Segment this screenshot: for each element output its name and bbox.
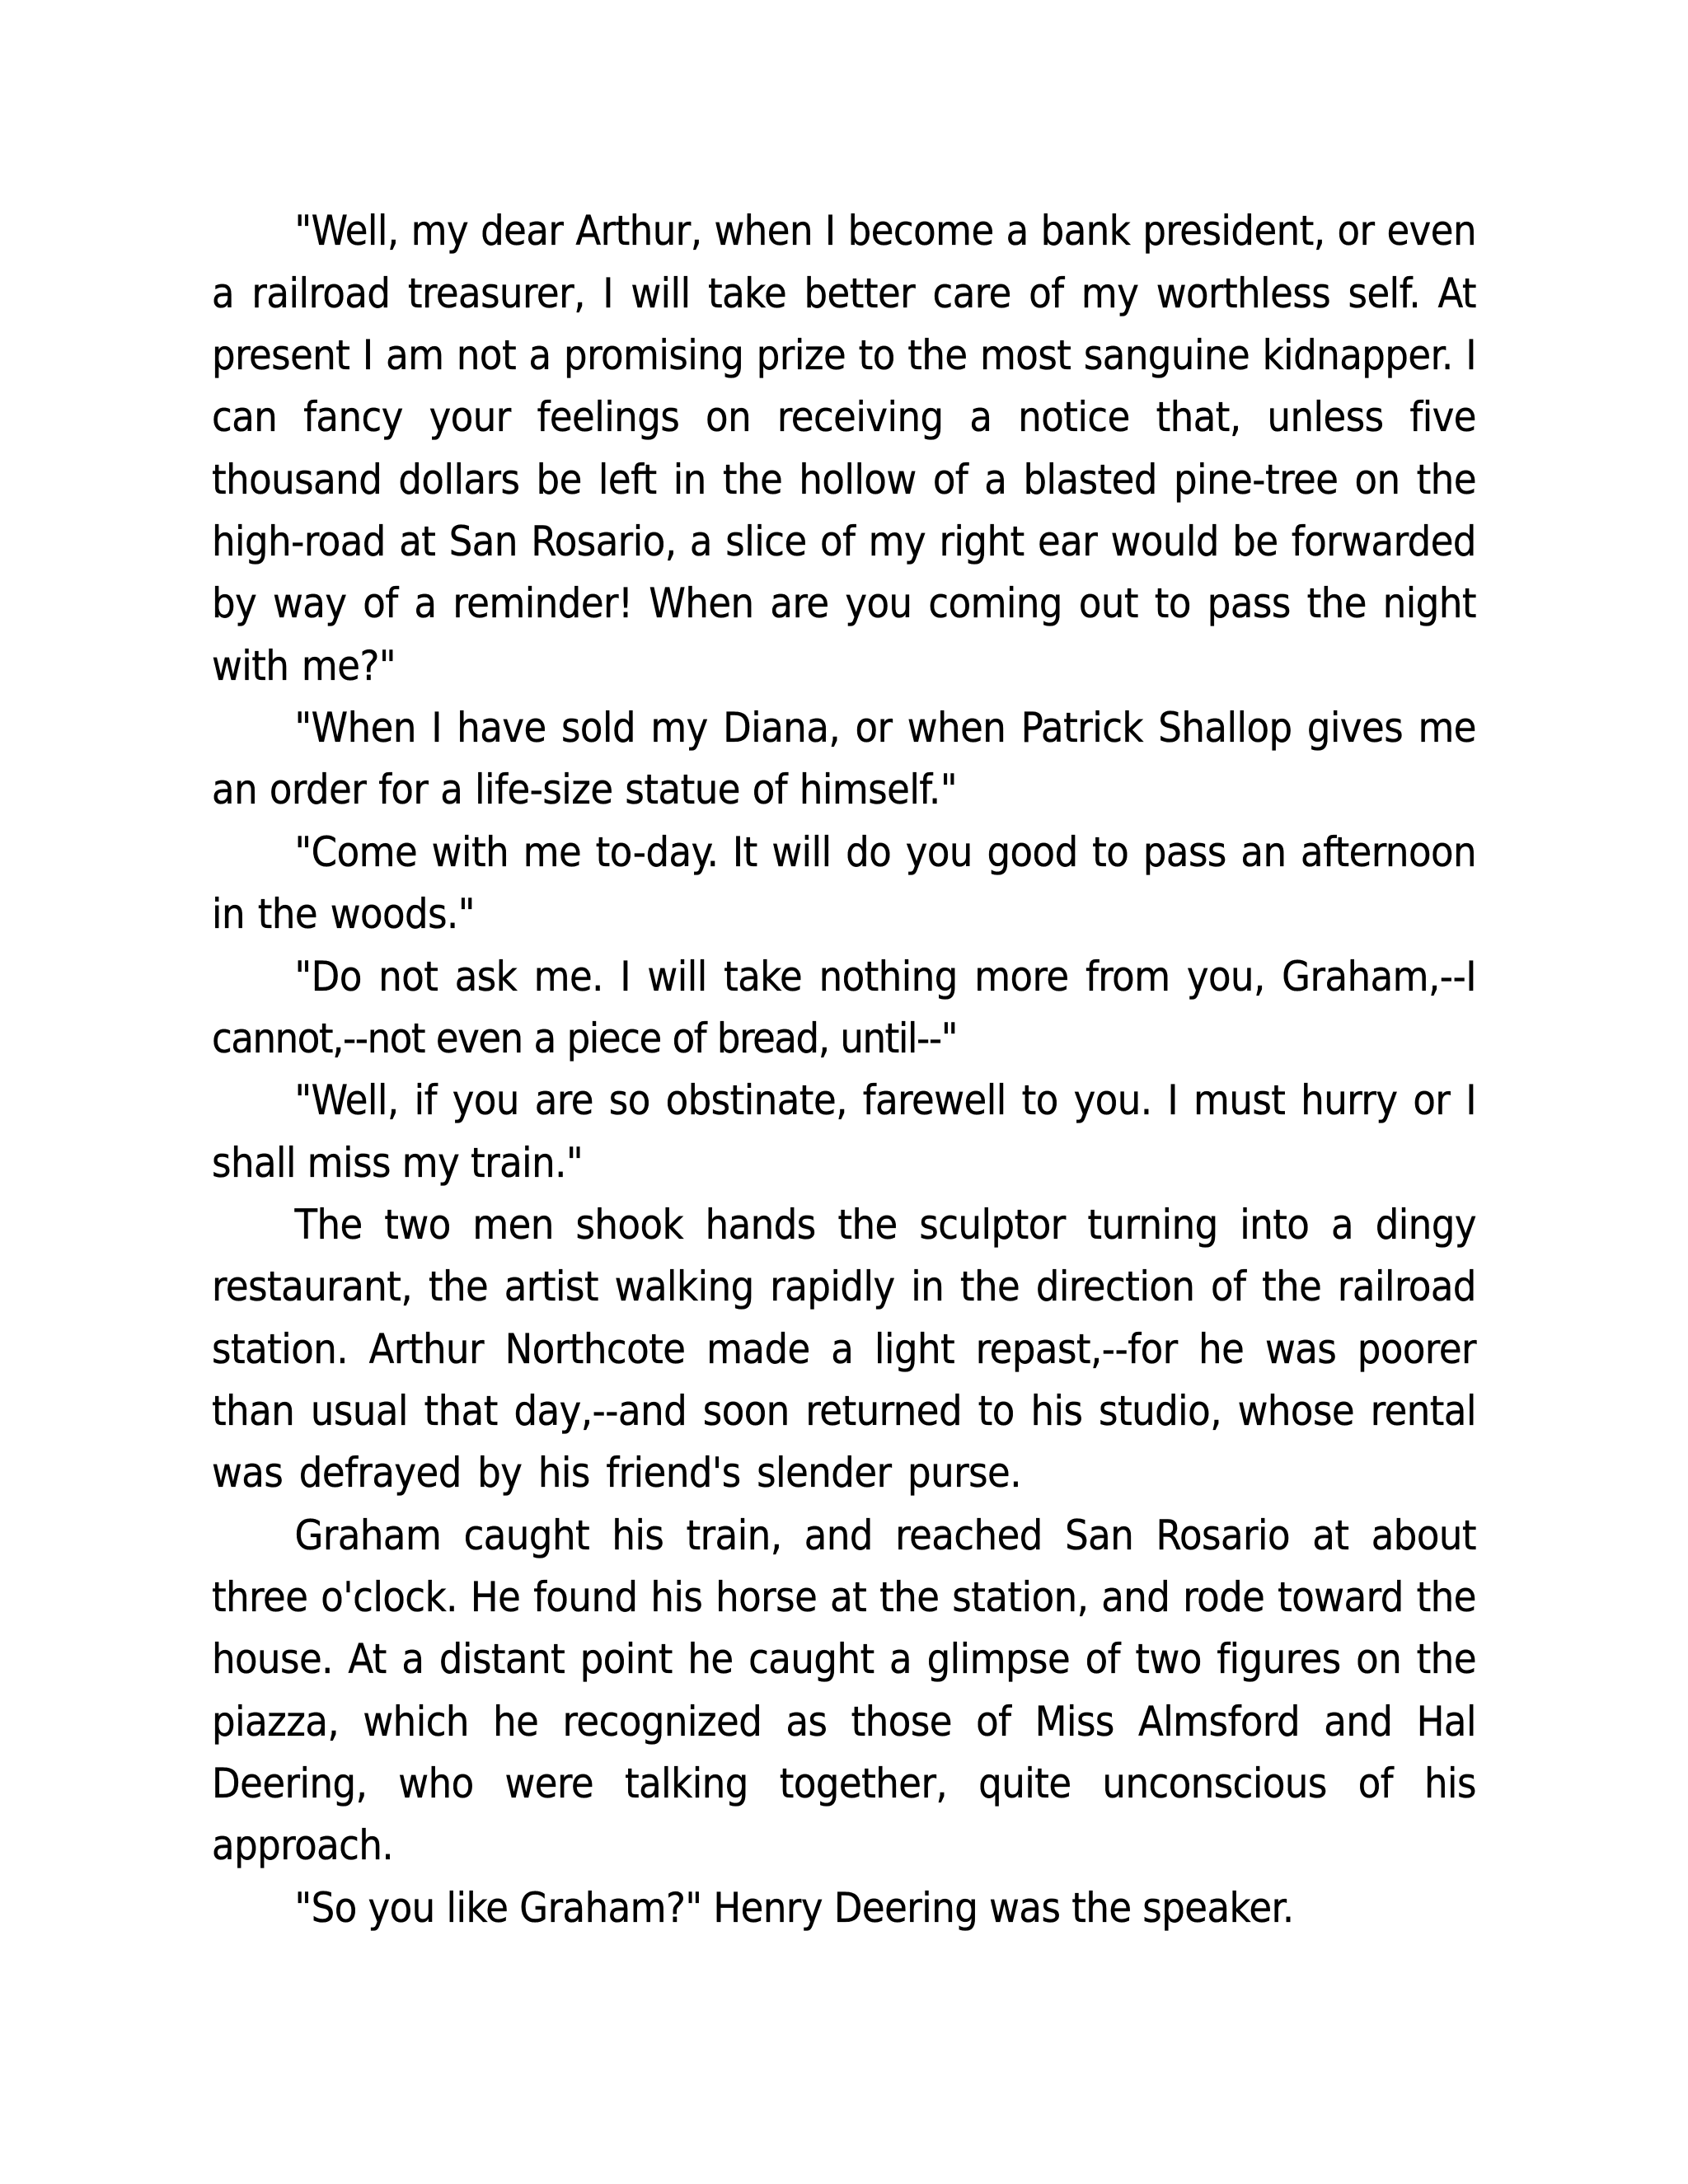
paragraph: Do not ask me: "Do not ask me. I will take nothing more from you, Graham,--I <box>295 953 1476 1001</box>
paragraph: Graham caught his train: piazza, which he recognized as those of Miss Almsford and Hal <box>212 1698 1476 1746</box>
paragraph: The two men shook hands <box>212 1201 1477 1497</box>
paragraph: Well, if you are so obstinate: shall miss my train." <box>212 1139 583 1187</box>
paragraph: Graham caught his train: house. At a distant point he caught a glimpse of two figures on the <box>212 1635 1476 1683</box>
paragraph: Well, my dear Arthur: can fancy your feelings on receiving a notice that, unless five <box>212 393 1476 441</box>
paragraph: Well, my dear Arthur: by way of a reminder! When are you coming out to pass the night <box>212 579 1476 627</box>
paragraph: The two men shook hands: was defrayed by his friend's slender purse. <box>212 1449 1021 1497</box>
paragraph: When I have sold my Diana: an order for a life-size statue of himself." <box>212 766 957 813</box>
paragraph: Come with me to-day: "Come with me to-day. It will do you good to pass an afternoon <box>295 828 1476 876</box>
paragraph: Do not ask me: cannot,--not even a piece of bread, until--" <box>212 1015 957 1062</box>
paragraph: Graham caught his train: three o'clock. He found his horse at the station, and rode toward the <box>212 1573 1476 1621</box>
paragraph: Well, my dear Arthur: present I am not a promising prize to the most sanguine kidnapper. I <box>212 331 1476 379</box>
paragraph: When I have sold my Diana <box>212 704 1476 813</box>
body text column <box>212 207 1477 1932</box>
paragraph: Well, my dear Arthur: high-road at San Rosario, a slice of my right ear would be forwarded <box>212 518 1476 565</box>
paragraph: Well, if you are so obstinate <box>212 1076 1476 1187</box>
paragraph: Well, my dear Arthur: "Well, my dear Arthur, when I become a bank president, or even <box>295 207 1476 255</box>
paragraph: The two men shook hands: restaurant, the artist walking rapidly in the direction of the railroad <box>212 1263 1476 1310</box>
paragraph: Graham caught his train: Graham caught his train, and reached San Rosario at about <box>295 1511 1476 1559</box>
paragraph: Graham caught his train: approach. <box>212 1821 393 1869</box>
paragraph: Graham caught his train: Deering, who were talking together, quite unconscious of his <box>212 1760 1476 1807</box>
paragraph: The two men shook hands: than usual that day,--and soon returned to his studio, whose rental <box>212 1387 1476 1435</box>
paragraph: The two men shook hands: station. Arthur Northcote made a light repast,--for he was poorer <box>212 1325 1476 1373</box>
paragraph: Well, my dear Arthur <box>212 207 1476 690</box>
paragraph: Well, my dear Arthur: thousand dollars be left in the hollow of a blasted pine-tree on the <box>212 456 1476 504</box>
paragraph: The two men shook hands: The two men shook hands the sculptor turning into a dingy <box>295 1201 1476 1249</box>
paragraph: Come with me to-day: in the woods." <box>212 890 475 938</box>
paragraph: So you like Graham: "So you like Graham?" Henry Deering was the speaker. <box>295 1884 1294 1932</box>
paragraph: Well, my dear Arthur: a railroad treasurer, I will take better care of my worthless self. At <box>212 269 1476 317</box>
paragraph: Well, if you are so obstinate: "Well, if you are so obstinate, farewell to you. I must hurry or I <box>295 1076 1476 1124</box>
paragraph: Graham caught his train <box>212 1511 1476 1869</box>
paragraph: Come with me to-day <box>212 828 1476 938</box>
paragraph: Well, my dear Arthur: with me?" <box>212 642 396 690</box>
paragraph: Do not ask me <box>212 953 1476 1062</box>
paragraph: When I have sold my Diana: "When I have sold my Diana, or when Patrick Shallop gives me <box>295 704 1476 752</box>
